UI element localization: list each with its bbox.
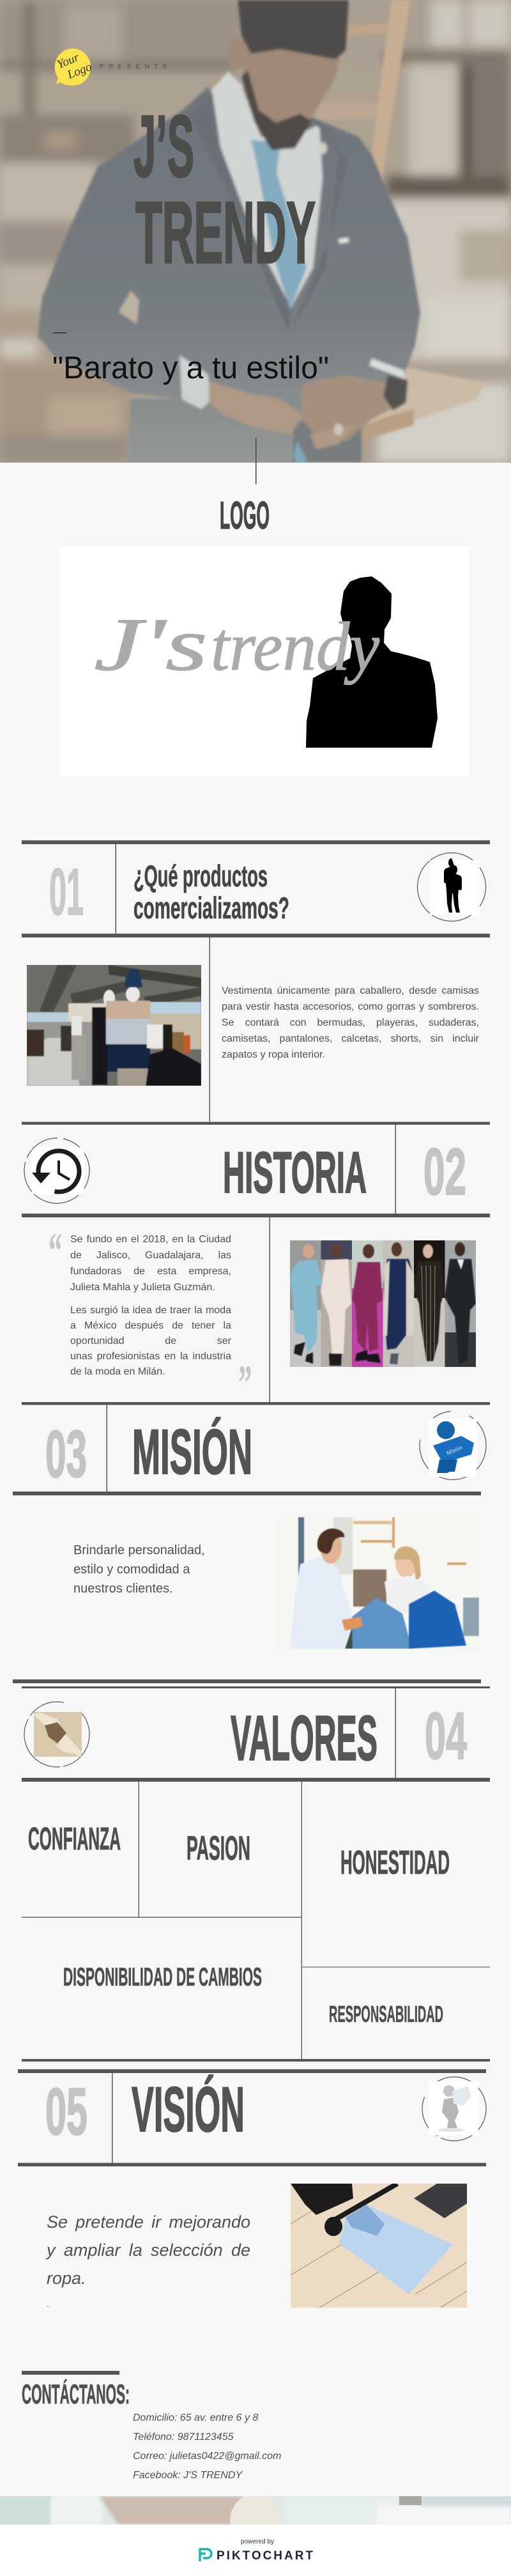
section 01 header: 01 (49, 855, 84, 929)
mission photo (279, 1517, 479, 1649)
header photo: man in suit (0, 0, 511, 498)
text: history paragraph two: a México después de tener la (70, 1320, 231, 1330)
text: products description: Vestimenta únicamente para caballero, desde camisas (222, 985, 479, 996)
text: contact details: Correo: julietas0422@gmail.com (133, 2450, 281, 2462)
text: products description: camisetas, pantalones, calcetas, shorts, sin incluir (222, 1033, 479, 1044)
your logo badge (55, 49, 94, 86)
value: confianza: CONFIANZA (28, 1822, 121, 1856)
icon: standing man (418, 852, 485, 922)
footer photo strip (0, 2496, 511, 2524)
text: vision statement: . (47, 2299, 49, 2309)
title: HISTORIA (223, 1141, 367, 1205)
number 02: 02 (423, 1135, 466, 1208)
icon: vision figure (422, 2077, 486, 2141)
contact bar (22, 2371, 119, 2375)
text: history paragraph two: de la moda en Milán. (70, 1366, 165, 1377)
script logotype: trendy (211, 609, 379, 685)
text: products description: zapatos y ropa interior. (222, 1049, 325, 1060)
title: ¿Qué productos (133, 859, 268, 893)
text: LOGO (220, 494, 270, 537)
text: history paragraph two: unas profesionistas en la industria (70, 1351, 231, 1361)
section 02 header (22, 1125, 490, 1217)
logo panel (60, 546, 469, 776)
section 01 store photo (27, 965, 201, 1086)
main title: J’S (133, 98, 194, 196)
title: VISIÓN (132, 2074, 245, 2145)
text: history paragraph two: oportunidad de ser (70, 1336, 231, 1346)
footer white band (0, 2524, 511, 2576)
text: vision statement (46, 2212, 250, 2309)
your logo badge: Your (55, 50, 81, 72)
text: CONTÁCTANOS: (22, 2379, 130, 2410)
fashion runway photo (290, 1240, 476, 1367)
text: history paragraph one: fundadoras de esta empresa, (70, 1266, 231, 1277)
section 01 header (22, 840, 490, 937)
piktochart credit: PIKTOCHART (217, 2549, 313, 2563)
main title: TRENDY (135, 184, 316, 282)
text: mission statement: nuestros clientes. (73, 1582, 173, 1596)
text: products description: para vestir hasta accesorios, como gorras y sombreros. (222, 1001, 479, 1012)
value: disponibilidad de cambios: DISPONIBILIDAD DE CAMBIOS (63, 1963, 262, 1991)
section 04 header (22, 1688, 490, 1782)
number 03: 03 (45, 1417, 87, 1492)
text: mission statement: Brindarle personalidad, (73, 1543, 205, 1557)
silhouette (306, 576, 438, 748)
title: comercializamos? (133, 891, 289, 925)
text: contact details: Teléfono: 9871123455 (133, 2431, 233, 2442)
text: mission statement: estilo y comodidad a (73, 1562, 190, 1577)
section 03 header (13, 1402, 490, 1495)
text: history paragraph two: Les surgió la idea de traer la moda (70, 1305, 231, 1315)
text: history paragraph one: Julieta Mahla y Julieta Guzmán. (70, 1282, 215, 1293)
text: products description (222, 985, 479, 1060)
your logo badge: Logo (65, 60, 94, 82)
opening quote mark: “ (49, 1223, 62, 1278)
tagline: "Barato y a tu estilo" (52, 351, 329, 385)
number 04: 04 (425, 1699, 467, 1773)
text: vision statement: Se pretende ir mejorando (47, 2212, 250, 2232)
text: contact details (133, 2412, 281, 2481)
number 05: 05 (45, 2075, 88, 2149)
text: mission statement (73, 1543, 205, 1596)
icon: history clock (24, 1138, 89, 1203)
text: history paragraph two (70, 1305, 231, 1377)
script logotype: J's (94, 603, 208, 686)
closing quote mark: ” (238, 1355, 252, 1410)
section 04 bottom rule (22, 2059, 490, 2062)
text: contact details: Facebook: J'S TRENDY (133, 2469, 242, 2481)
title: MISIÓN (132, 1416, 252, 1487)
icon: puzzle figure (420, 1411, 486, 1480)
script logotype (94, 603, 379, 686)
piktochart credit: powered by (241, 2538, 274, 2545)
section 02 rule (22, 1122, 490, 1125)
text: history paragraph one (70, 1234, 231, 1293)
text: products description: Se contará con bermudas, playeras, sudaderas, (222, 1017, 479, 1028)
presents label: PRESENTS (100, 63, 167, 70)
icon: puzzle figure: Misión (446, 1444, 463, 1456)
title (133, 859, 289, 925)
text: history paragraph one: de Jalisco, Guadalajara, las (70, 1250, 231, 1261)
piktochart credit (200, 2538, 313, 2563)
text: contact details: Domicilio: 65 av. entre 6 y 8 (133, 2412, 258, 2423)
main title (133, 98, 316, 282)
section 04 rules (13, 1679, 490, 1688)
values grid lines (22, 1782, 490, 2059)
vision photo (291, 2184, 467, 2308)
text: vision statement: y ampliar la selección de (47, 2241, 250, 2260)
text: vision statement: ropa. (47, 2269, 86, 2288)
connector line (256, 438, 257, 484)
value: pasion: PASION (187, 1830, 250, 1867)
section 05 header (18, 2069, 486, 2166)
piktochart icon (200, 2549, 211, 2561)
text: history paragraph one: Se fundo en el 2018, en la Ciudad (70, 1234, 231, 1245)
icon: hands (24, 1702, 89, 1767)
